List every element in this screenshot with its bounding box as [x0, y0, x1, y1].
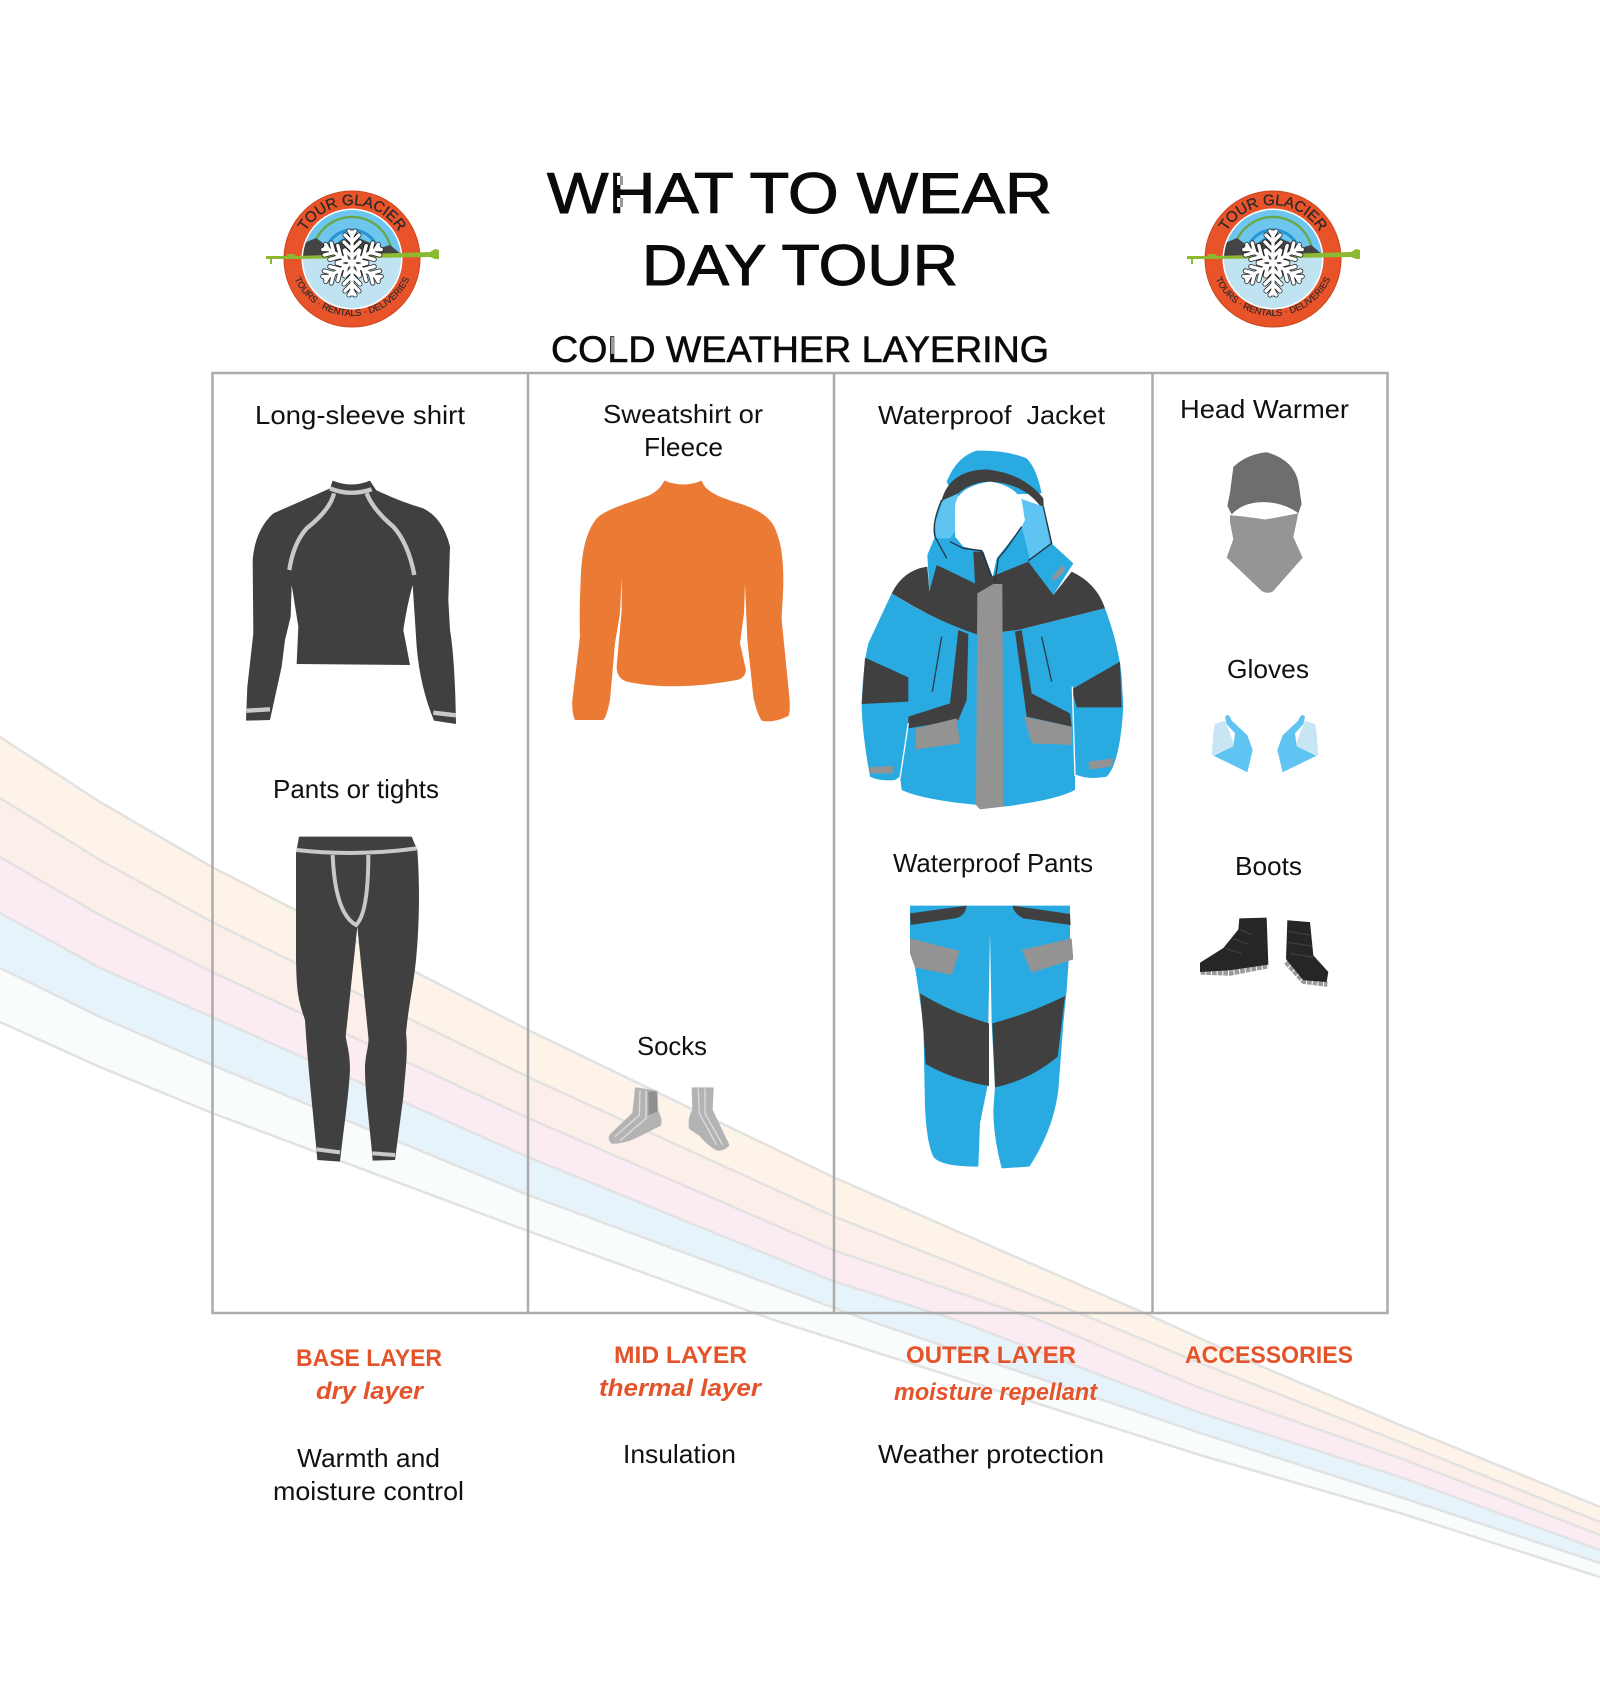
title [547, 162, 1052, 298]
label: sweatshirt or fleece: Sweatshirt or [603, 399, 763, 429]
icon: jacket [862, 451, 1123, 809]
logo: right [1187, 190, 1360, 328]
label: socks: Socks [637, 1031, 707, 1061]
logo: left: TOUR GLACIER [296, 194, 406, 232]
label: waterproof pants: Waterproof Pants [893, 848, 1093, 878]
icon: gloves [1212, 715, 1318, 772]
caption: base layer: moisture control [273, 1476, 464, 1506]
panel: mid layer [572, 399, 790, 1150]
caption: outer layer: Weather protection [878, 1439, 1104, 1469]
caption: accessories: ACCESSORIES [1185, 1342, 1353, 1369]
ribbon background [0, 737, 1600, 1577]
icon: boots [1200, 918, 1328, 984]
caption: mid layer [599, 1342, 763, 1469]
icon: long-sleeve shirt [246, 481, 456, 724]
label: gloves: Gloves [1227, 654, 1309, 684]
label: pants or tights: Pants or tights [273, 774, 439, 804]
icon: waterproof pants [910, 906, 1073, 1168]
title: WHAT TO WEAR [547, 162, 1052, 226]
caption: outer layer: moisture repellant [894, 1379, 1098, 1406]
caption: base layer: BASE LAYER [296, 1345, 442, 1372]
label: sweatshirt or fleece [603, 399, 763, 462]
icon: balaclava [1227, 452, 1303, 593]
logo: left [266, 190, 439, 328]
caption: base layer: dry layer [316, 1378, 425, 1405]
caption: base layer [273, 1345, 464, 1506]
label: sweatshirt or fleece: Fleece [644, 432, 723, 462]
label: long-sleeve shirt: Long-sleeve shirt [255, 400, 466, 430]
logo: right: TOURS · RENTALS · DELIVERIES [1216, 276, 1330, 316]
logo: left: TOURS · RENTALS · DELIVERIES [296, 276, 409, 316]
caption: base layer: Warmth and [297, 1443, 440, 1473]
caption: outer layer: OUTER LAYER [906, 1342, 1076, 1369]
panel: base layer [246, 400, 466, 1162]
logo: right: TOUR GLACIER [1218, 194, 1326, 232]
caption: mid layer: MID LAYER [614, 1342, 747, 1369]
caption: mid layer: Insulation [623, 1439, 736, 1469]
icon: tights [296, 837, 419, 1162]
subtitle: COLD WEATHER LAYERING [551, 329, 1049, 370]
title: DAY TOUR [642, 234, 958, 298]
caption: outer layer [878, 1342, 1104, 1469]
caption: mid layer: thermal layer [599, 1375, 763, 1402]
icon: fleece [572, 481, 790, 721]
table grid [212, 373, 1388, 1313]
panel: accessories [1180, 394, 1349, 984]
label: waterproof jacket: Waterproof Jacket [878, 400, 1106, 430]
label: head warmer: Head Warmer [1180, 394, 1349, 424]
panel: outer layer [862, 400, 1123, 1168]
icon: socks [610, 1088, 728, 1150]
label: boots: Boots [1235, 851, 1302, 881]
